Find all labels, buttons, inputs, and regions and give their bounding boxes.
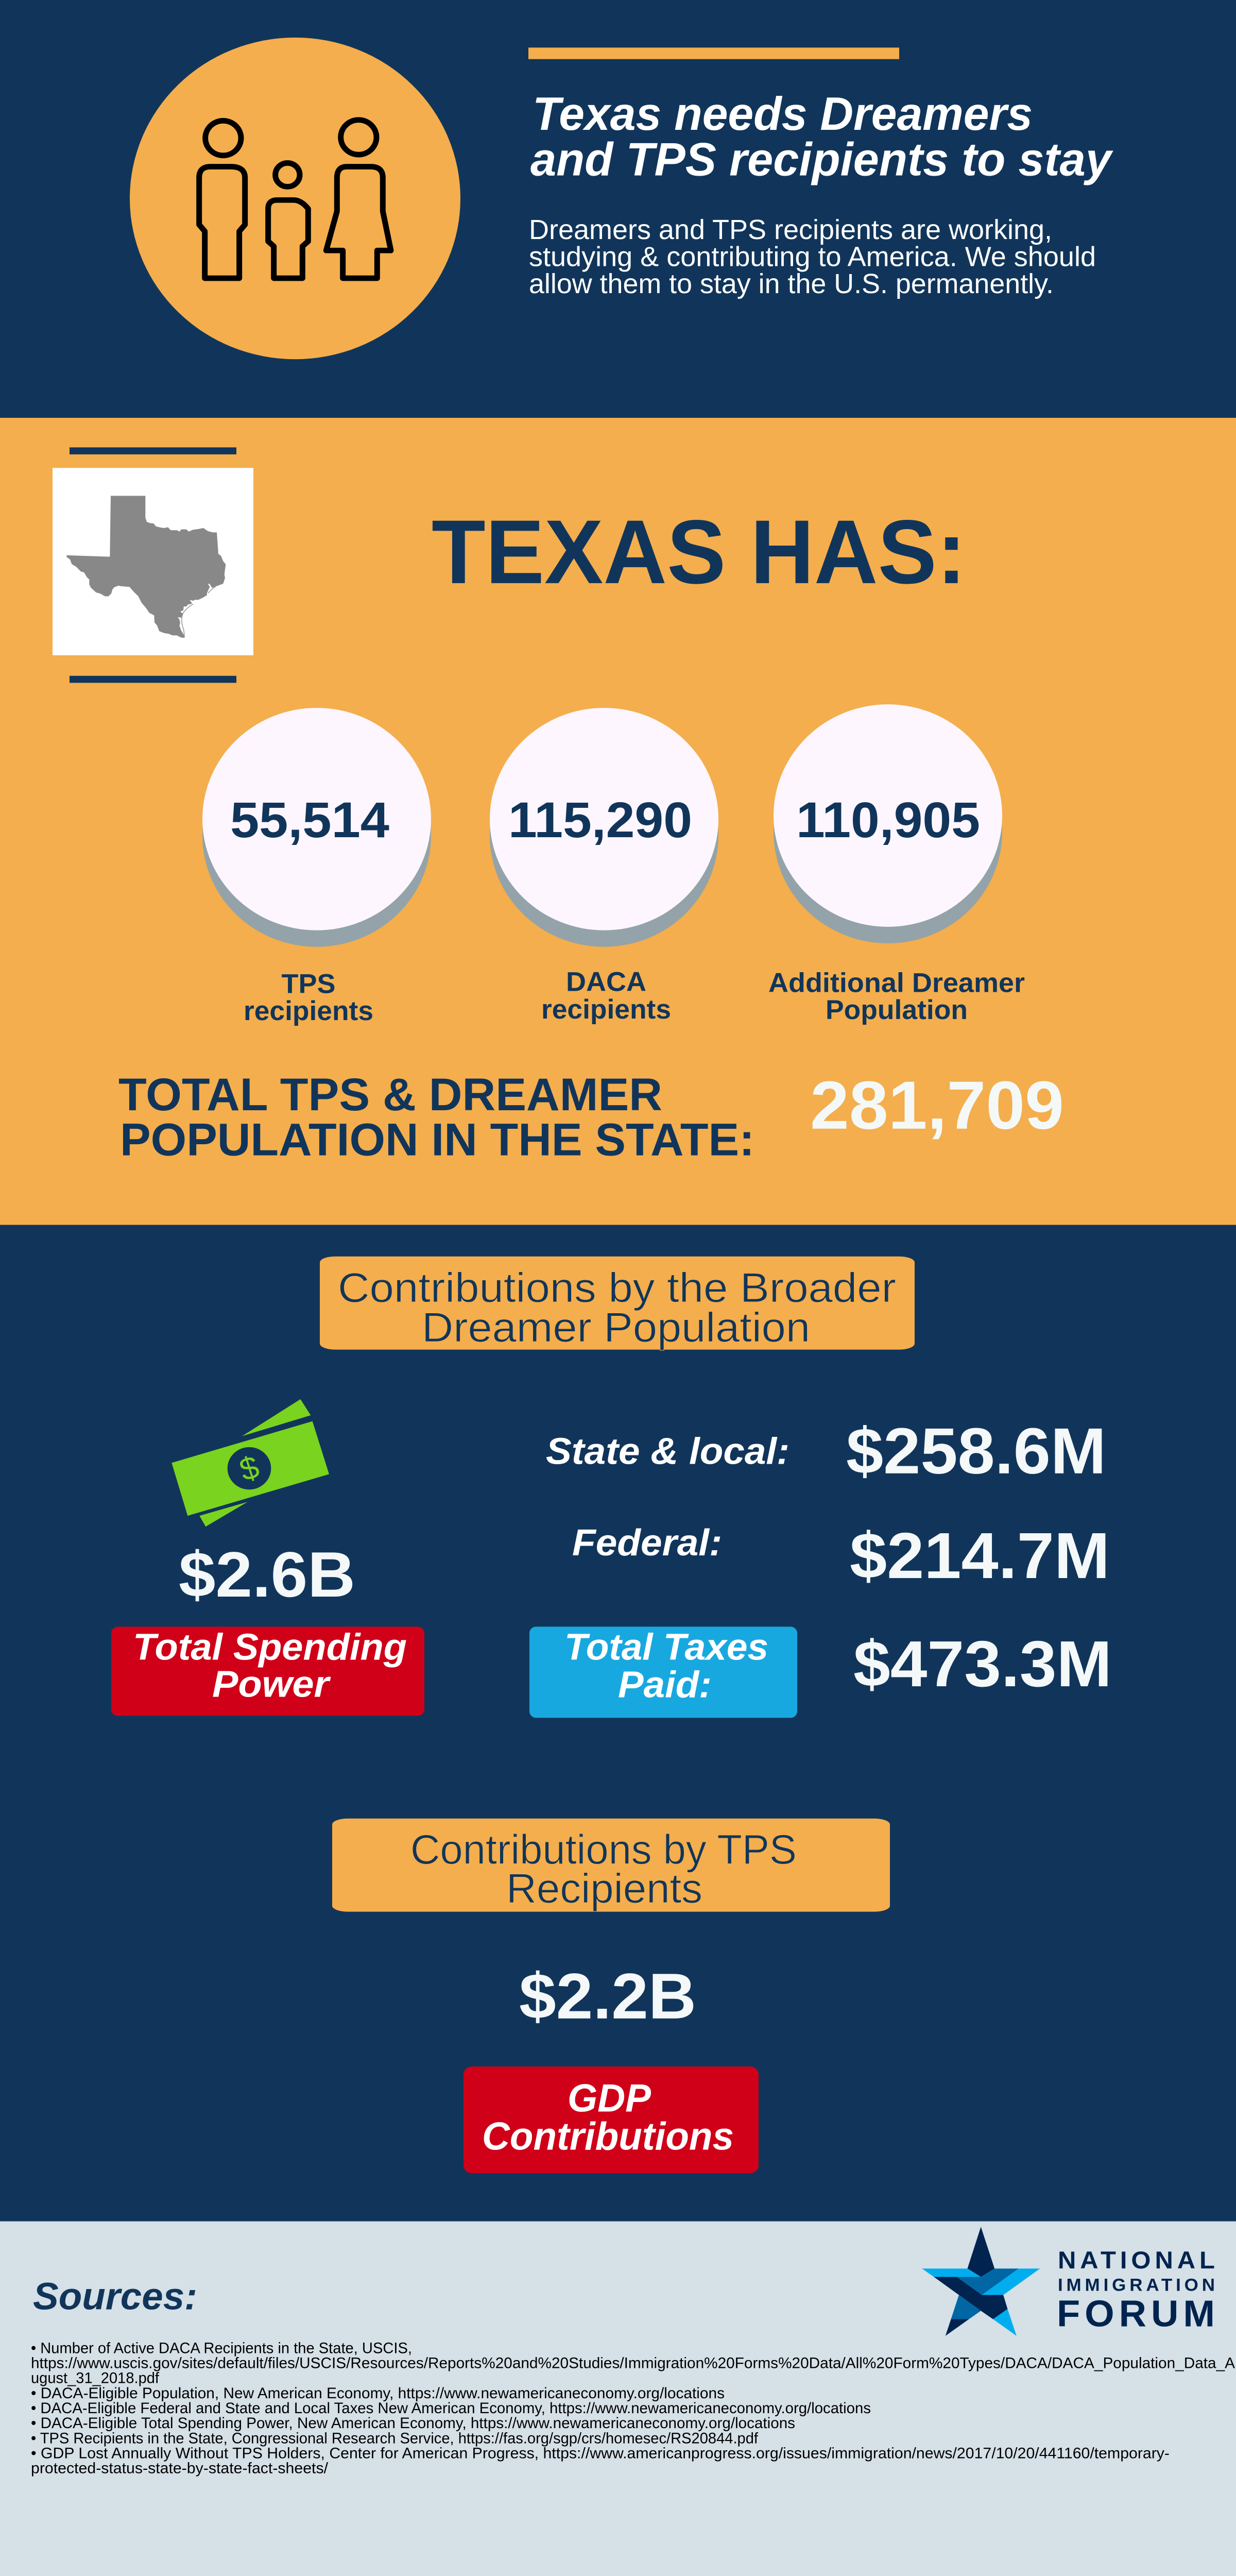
logo: National Immigration Forum: FORUM	[1057, 2294, 1215, 2335]
stat: DACA recipients: recipients	[541, 995, 671, 1025]
logo: National Immigration Forum: NATIONAL	[1058, 2247, 1215, 2274]
label: total taxes paid: Total Taxes	[564, 1626, 768, 1668]
stat: additional Dreamer population: 110,905	[796, 792, 980, 848]
panel: header	[0, 0, 1236, 418]
stat: DACA recipients: 115,290	[508, 792, 692, 848]
panel: Texas has	[0, 418, 1236, 1225]
source list: ugust_31_2018.pdf	[31, 2370, 160, 2387]
source list: protected-status-state-by-state-fact-sheets/	[31, 2460, 329, 2477]
label: federal taxes: Federal:	[572, 1522, 722, 1564]
accent bar	[528, 47, 899, 59]
stat: GDP value: $2.2B	[519, 1960, 696, 2032]
intro text: allow them to stay in the U.S. permanently.	[529, 269, 1054, 299]
heading box: Contributions by TPS Recipients	[332, 1819, 890, 1912]
icon: Texas map card	[53, 447, 253, 683]
label: total spending power	[111, 1626, 424, 1716]
label: GDP contributions: Contributions	[482, 2114, 734, 2158]
icon: money bill: $	[235, 1449, 263, 1488]
stat: TPS recipients: recipients	[244, 996, 373, 1026]
total population number: 281,709	[810, 1067, 1064, 1143]
stat: additional Dreamer population: Additional Dreamer	[768, 968, 1025, 998]
title	[530, 87, 1113, 185]
heading box: Contributions by TPS Recipients: Recipients	[506, 1866, 702, 1912]
label: GDP contributions	[464, 2066, 759, 2173]
source list: • TPS Recipients in the State, Congressional Research Service, https://fas.org/sgp/crs/homesec/RS20844.pdf	[31, 2430, 759, 2447]
logo: National Immigration Forum: IMMIGRATION	[1058, 2276, 1215, 2295]
label: total taxes paid	[529, 1626, 797, 1718]
icon: family in orange circle	[130, 38, 460, 359]
heading box: Contributions by the Broader Dreamer Population: Dreamer Population	[422, 1304, 810, 1351]
label: state and local taxes: State & local:	[546, 1431, 789, 1472]
total population label: TOTAL TPS & DREAMER	[118, 1069, 662, 1121]
source list: • GDP Lost Annually Without TPS Holders, Center for American Progress, https://www.americanprogress.org/issues/immigration/news/2017/10/20/441160/temporary-	[31, 2445, 1170, 2462]
total population label	[118, 1069, 754, 1165]
total population label: POPULATION IN THE STATE:	[120, 1114, 754, 1165]
intro text: Dreamers and TPS recipients are working,	[529, 215, 1052, 245]
panel: Dreamer contributions	[0, 1225, 1236, 1726]
intro text: studying & contributing to America. We should	[529, 242, 1096, 272]
panel: sources	[0, 2222, 1236, 2576]
intro text	[529, 215, 1096, 299]
source list: • DACA-Eligible Federal and State and Local Taxes New American Economy, https://www.newamericaneconomy.org/locations	[31, 2400, 871, 2417]
value: federal taxes: $214.7M	[850, 1520, 1110, 1592]
label: GDP contributions: GDP	[568, 2077, 651, 2120]
stat: spending power value: $2.6B	[179, 1539, 355, 1611]
stat: TPS recipients: TPS	[281, 969, 336, 999]
heading box: Contributions by the Broader Dreamer Population	[320, 1257, 915, 1351]
label: total spending power: Power	[212, 1664, 331, 1705]
stat: additional Dreamer population	[768, 704, 1025, 1025]
stat: TPS recipients: 55,514	[230, 792, 389, 848]
source list: • DACA-Eligible Population, New American Economy, https://www.newamericaneconomy.org/locations	[31, 2385, 725, 2402]
source list: • Number of Active DACA Recipients in the State, USCIS,	[31, 2340, 412, 2357]
label: total spending power: Total Spending	[133, 1626, 407, 1668]
heading: TEXAS HAS: TEXAS HAS:	[432, 501, 966, 602]
panel: TPS contributions	[0, 1726, 1236, 2222]
label: total taxes paid: Paid:	[618, 1664, 712, 1705]
source list: • DACA-Eligible Total Spending Power, New American Economy, https://www.newamericaneconomy.org/locations	[31, 2415, 795, 2432]
title: Texas needs Dreamers	[533, 87, 1033, 140]
stat: TPS recipients	[202, 708, 431, 1026]
stat: additional Dreamer population: Population	[826, 995, 968, 1025]
stat: DACA recipients: DACA	[566, 967, 646, 997]
heading: Sources: Sources:	[33, 2275, 197, 2317]
heading box: Contributions by the Broader Dreamer Population: Contributions by the Broader	[338, 1265, 896, 1311]
source list: https://www.uscis.gov/sites/default/files/USCIS/Resources/Reports%20and%20Studies/Immigration%20Forms%20Data/All%20Form%20Types/DACA/DACA_Population_Data_A	[31, 2355, 1235, 2371]
source list	[31, 2340, 1235, 2477]
title: and TPS recipients to stay	[530, 133, 1113, 185]
icon: money bill	[171, 1399, 329, 1527]
value: total taxes paid: $473.3M	[853, 1628, 1112, 1701]
stat: DACA recipients	[490, 708, 718, 1025]
heading box: Contributions by TPS Recipients: Contributions by TPS	[410, 1826, 797, 1873]
value: state and local taxes: $258.6M	[846, 1415, 1106, 1487]
logo: National Immigration Forum	[922, 2227, 1215, 2336]
